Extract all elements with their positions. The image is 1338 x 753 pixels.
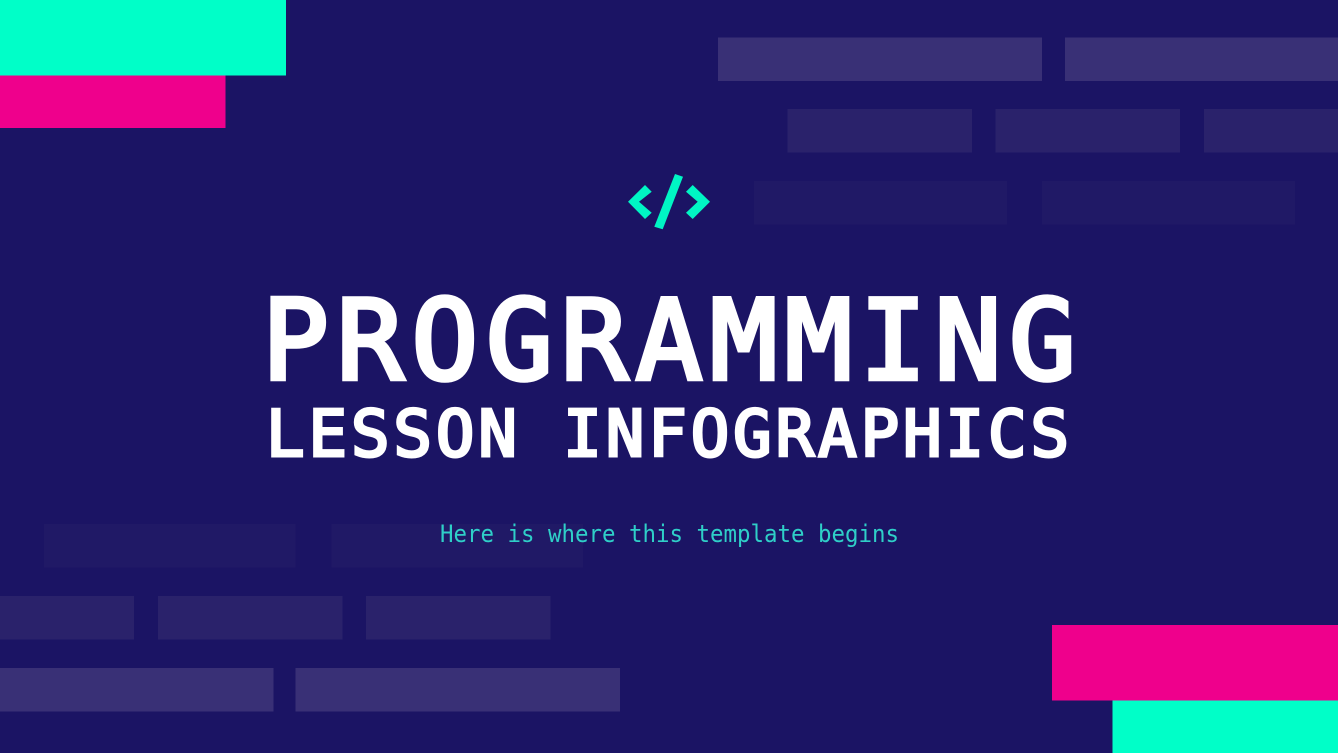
tagline: Here is where this template begins — [440, 520, 899, 548]
top-left corner blocks — [0, 0, 286, 128]
title: PROGRAMMING — [262, 277, 1076, 406]
top-right decorative code bars — [718, 38, 1338, 224]
icon: code brackets — [628, 174, 710, 229]
bottom-right corner blocks — [1052, 625, 1338, 753]
bottom-left decorative code bars — [0, 524, 620, 712]
subtitle heading: LESSON INFOGRAPHICS — [266, 398, 1069, 472]
